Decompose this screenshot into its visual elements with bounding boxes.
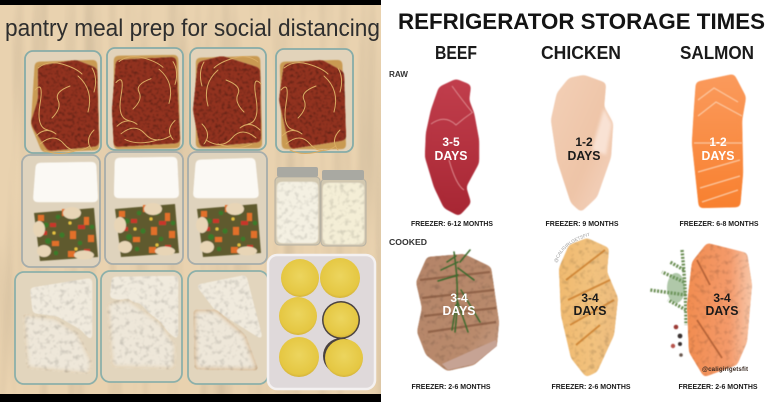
container: spaghetti 3 <box>190 48 266 150</box>
container: rice and vegetables 3 <box>188 152 267 264</box>
label: 3-5 days: 3-5 <box>442 135 460 149</box>
container: tortillas 1 <box>15 272 97 384</box>
column heading: beef: BEEF <box>435 43 477 63</box>
box of corn muffins <box>268 255 375 389</box>
raw beef <box>425 79 479 216</box>
cooked beef <box>416 250 499 371</box>
freezer note: beef cooked: FREEZER: 2-6 MONTHS <box>412 382 491 391</box>
jar: popcorn left <box>275 167 320 245</box>
panel: refrigerator storage times <box>389 9 765 391</box>
panel: pantry meal prep photo <box>0 0 381 402</box>
label: 3-4 days: 3-4 <box>581 291 599 305</box>
container: tortillas 2 <box>101 271 182 382</box>
top black bar <box>0 0 381 5</box>
container: rice and vegetables 2 <box>105 152 183 264</box>
label: 3-4 days <box>574 291 607 318</box>
label: 3-4 days: DAYS <box>706 303 739 318</box>
container: tortillas 3 <box>188 271 268 384</box>
muffin <box>281 259 319 297</box>
column heading: chicken: CHICKEN <box>541 43 621 63</box>
wood table background <box>0 0 381 402</box>
label: 1-2 days <box>568 135 601 163</box>
heading: refrigerator storage times: REFRIGERATOR STORAGE TIMES <box>398 9 765 34</box>
watermark: caligirlgetsfit: @CALIGIRLGETSFIT <box>554 232 590 262</box>
freezer note: beef raw: FREEZER: 6-12 MONTHS <box>411 219 493 228</box>
cooked chicken <box>554 232 618 377</box>
label: 3-4 days <box>706 291 739 318</box>
container: spaghetti 4 <box>276 49 353 154</box>
icon: rosemary sprig <box>438 250 480 332</box>
freezer note: salmon raw: FREEZER: 6-8 MONTHS <box>680 219 759 228</box>
freezer note: salmon cooked: FREEZER: 2-6 MONTHS <box>678 382 758 391</box>
label: 1-2 days <box>702 135 735 163</box>
label: 3-4 days: DAYS <box>574 303 607 318</box>
cooked salmon <box>687 243 752 377</box>
label: 1-2 days: DAYS <box>568 148 601 163</box>
muffin <box>322 301 360 339</box>
label: 3-4 days: 3-4 <box>713 291 731 305</box>
row label: raw: RAW <box>389 70 408 79</box>
bottom black bar <box>0 394 381 402</box>
freezer note: chicken raw: FREEZER: 9 MONTHS <box>546 219 619 228</box>
row label: cooked: COOKED <box>389 238 427 247</box>
muffin <box>323 338 363 377</box>
heading: pantry meal prep: pantry meal prep for social distancing <box>5 15 380 42</box>
icon: thyme and peppercorns <box>650 250 686 357</box>
muffin <box>320 258 360 298</box>
label: 3-5 days: DAYS <box>434 148 468 163</box>
label: 3-4 days: DAYS <box>442 303 476 318</box>
label: 1-2 days: 1-2 <box>575 135 593 149</box>
freezer note: chicken cooked: FREEZER: 2-6 MONTHS <box>552 382 631 391</box>
label: 3-4 days <box>442 291 476 318</box>
raw chicken <box>551 75 613 212</box>
container: rice and vegetables 1 <box>22 155 100 267</box>
container: spaghetti 2 <box>107 48 183 150</box>
label: 3-5 days <box>434 135 468 163</box>
jar: popcorn right <box>321 170 366 246</box>
label: 3-4 days: 3-4 <box>450 291 468 305</box>
column heading: salmon: SALMON <box>680 43 754 63</box>
container: spaghetti 1 <box>25 51 101 154</box>
muffin <box>279 297 317 335</box>
label: 1-2 days: DAYS <box>702 148 735 163</box>
muffin <box>279 337 319 377</box>
label: 1-2 days: 1-2 <box>709 135 727 149</box>
watermark: caligirlgetsfit: @caligirlgetsfit <box>702 366 748 373</box>
white background <box>381 0 768 402</box>
raw salmon <box>692 74 746 208</box>
